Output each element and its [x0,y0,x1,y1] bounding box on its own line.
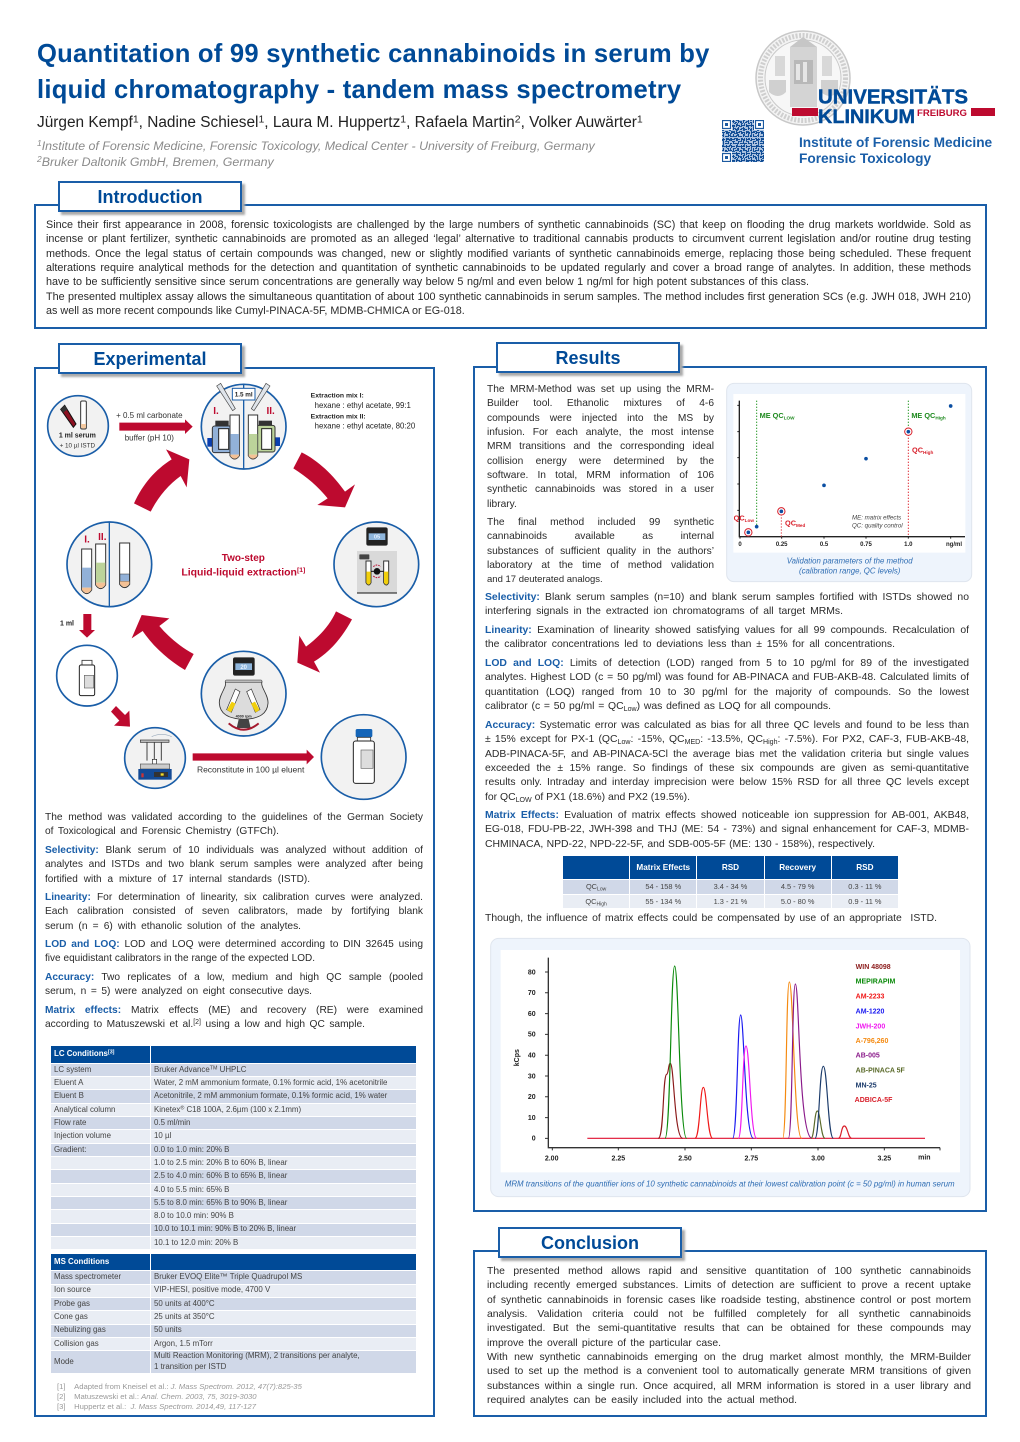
affiliations [37,138,596,169]
arrow: reconstitute: Reconstitute in 100 µl eluent [197,765,305,775]
text: conclusion: used to set up the method is a convenient tool to automatically generate MRM transitions of given [487,1366,971,1377]
table: LC and MS conditions: 8.0 to 10.0 min: 90% B [154,1211,234,1220]
university seal and logo [755,30,995,128]
circle: extraction mixes I and II: II. [266,406,275,417]
table: LC and MS conditions: Ion source [54,1285,91,1294]
icon: university seal [756,31,850,125]
text: accuracy results: exceeded the ± 15% range. So findings of these six compounds are given as semi-quantitative [485,763,969,774]
text: matrix effects: Matrix effects: Matrix effects (ME) and recovery (RE) were examined [45,1005,423,1016]
plot area and axes: 3.25 [878,1155,891,1162]
text: MRM method: The MRM-Method was set up using the MRM- [487,384,714,395]
plot area and axes: 40 [528,1053,536,1060]
arrow: to shaking [293,452,355,507]
text: accuracy results: results only. Intraday and interday imprecision were below 15% RSD for all three QC levels except [485,777,969,788]
table: LC and MS conditions: Mode [54,1357,74,1366]
chart labels: ME QC [911,411,935,420]
table: LC and MS conditions: 10.1 to 12.0 min: 20% B [154,1238,238,1247]
circle: serum sample: 1 ml serum [59,433,96,440]
table: LC and MS conditions: Analytical column [54,1105,115,1114]
process diagram: two-step liquid-liquid extraction [46,382,420,800]
plot area and axes: 2.75 [745,1155,758,1162]
text: matrix effects results: Matrix Effects: Evaluation of matrix effects showed noticeable ion suppression for AB-001, AKB48, [485,810,969,821]
panel: introduction [34,204,987,329]
table: matrix effects and recovery: Matrix Effects [636,863,690,872]
plot area and axes: kCps [514,1049,521,1066]
center label: Two-step [222,553,265,564]
text: conclusion: With new synthetic cannabinoids emerging on the drug market almost monthly, the MRM-Builder [487,1352,971,1363]
text: selectivity [45,845,423,885]
circle: separated phases: I. [84,535,90,546]
institute name: Institute of Forensic Medicine [799,135,992,150]
affiliations: 2Bruker Daltonik GmbH, Bremen, Germany [37,155,274,169]
table: LC and MS conditions: LC Conditions[3] [54,1049,114,1058]
table: LC and MS conditions: 1 transition per ISTD [154,1362,226,1371]
table: LC and MS conditions: Water, 2 mM ammonium formate, 0.1% formic acid, 1% acetonitrile [154,1078,387,1087]
text: linearity results [485,625,970,650]
text: introduction: Since their first appearance in 2008, forensic toxicologists are challenged by the large numbers of synthetic cannabinoids (SC) that keep on flooding the drug markets worldwide. Sold as [46,219,971,231]
chart note: ME: matrix effects [852,515,901,522]
text: influence of matrix effects: Though, the influence of matrix effects could be compensated by use of an appropriate ISTD. [485,913,937,924]
text: conclusion: required analytes can be easily included into the actual method. [487,1395,797,1406]
table: matrix effects and recovery: QCHigh [585,897,607,907]
table: LC and MS conditions: Bruker AdvanceTM UHPLC [154,1065,246,1074]
circle: extraction mixes I and II: I. [213,406,219,417]
table: matrix effects and recovery: 55 - 134 % [645,897,681,906]
table: matrix effects and recovery: 1.3 - 21 % [714,897,747,906]
text: accuracy [45,972,423,997]
text: accuracy: serum, n = 5) were analyzed on eight consecutive days. [45,986,312,997]
text: accuracy results: Accuracy: Systematic error was calculated as bias for all three QC levels and found to be less than [485,720,969,731]
plot area and axes: 50 [528,1032,536,1039]
arrow: back to extraction [134,449,189,512]
logo: wordmark [792,86,995,128]
references [57,1382,302,1411]
plot area [733,394,965,553]
text: MRM method: collision energy were determined by the [487,456,714,467]
text: introduction: The presented multiplex assay allows the simultaneous quantitation of about 100 synthetic cannabinoids in serum samples. The method includes first generation SCs (e.g. JWH 018, JWH 210) [46,291,971,303]
arrow: to evaporation [111,706,130,727]
text: MRM method: synthetic cannabinoids was stored in a user [487,484,714,495]
arrow: back to phase separation [132,615,194,670]
text: matrix effects results: CHMINACA, NPD-22, NPD-22-5F, and SDB-005-5F (ME: 130 - 158%), respectively. [485,839,875,850]
center label second line: Liquid-liquid extraction [181,567,288,578]
chromatogram peaks [587,966,925,1138]
text: LOD and LOQ results [485,658,970,713]
icon: QR code [722,120,764,162]
circle: extraction mixes I and II: 1.5 ml [235,391,253,398]
chart labels [734,411,962,548]
text: linearity results: Linearity: Examination of linearity showed satisfying values for all 99 compounds. Recalculation of [485,625,969,636]
chart caption: MRM transitions of the quantifier ions of 10 synthetic cannabinoids at their lowest calibration point (c = 50 pg/ml) in human serum [505,1180,955,1189]
heading: conclusion [498,1227,682,1258]
table: LC and MS conditions: 50 units [154,1325,182,1334]
chart labels: ME QC [760,411,784,420]
table: LC and MS conditions: 10.0 to 10.1 min: 90% B to 20% B, linear [154,1224,296,1233]
table: LC and MS conditions: 10 µl [154,1131,171,1140]
chart note: QC: quality control [852,523,903,530]
table: matrix effects and recovery: 54 - 158 % [645,882,681,891]
panel: results [473,366,987,1212]
chart labels: Med [796,523,805,528]
logo: wordmark: KLINIKUM [818,107,915,128]
text: method validation: of Toxicological and Forensic Chemistry (GTFCh). [45,826,279,837]
table: matrix effects and recovery: RSD [722,863,739,872]
circle: final vial [321,715,406,799]
table: LC and MS conditions [51,1046,416,1373]
table: matrix effects and recovery: RSD [856,863,874,872]
arrow: add carbonate buffer [116,411,193,443]
text: final method: and 17 deuterated analogs. [487,574,603,585]
affiliations: 1Institute of Forensic Medicine, Forensic Toxicology, Medical Center - University of Freiburg, Germany [37,138,595,153]
heading: introduction: Introduction [98,187,202,207]
chart caption: (calibration range, QC levels) [799,566,901,575]
institute name [799,135,992,166]
table: LC and MS conditions: 0.0 to 1.0 min: 20% B [154,1145,229,1154]
text: extraction mixes: hexane : ethyl acetate, 99:1 [315,401,411,410]
plot area and axes: 0 [532,1136,536,1143]
legend: MN-25 [856,1082,877,1089]
chart labels: 1.0 [904,542,913,548]
text: conclusion: including recently emerged substances. Limits of detection are sufficient to prove a recent uptake [487,1280,971,1291]
text: matrix effects results: EG-018, FDU-PB-22, JWH-398 and THJ (ME: 54 - 73%) and signal enhancement for CAF-3, MDMB- [485,824,969,835]
table: LC and MS conditions: 1.0 to 2.5 min: 20% B to 60% B, linear [154,1158,287,1167]
text: matrix effects: according to Matuszewski et al.[2] using a low and high QC sample. [45,1019,365,1030]
text: introduction [46,219,971,317]
table: LC and MS conditions: Eluent B [54,1091,84,1100]
heading: experimental [58,343,242,374]
circle: serum sample [48,396,108,456]
legend: MEPIRAPIM [856,979,896,986]
plot area and axes: 70 [528,990,536,997]
text: accuracy results [485,720,969,804]
heading: conclusion: Conclusion [541,1233,639,1253]
arrow: reconstitute [193,750,314,775]
legend [855,964,906,1104]
text: conclusion: improve the overall picture of the particular case. [487,1338,721,1349]
chart labels: High [923,450,934,455]
text: accuracy results: ADB-PINACA-5F, and AB-PINACA-5Cl the average bias met the validation criteria but single values [485,749,969,760]
text: accuracy: Accuracy: Two replicates of a low, medium and high QC sample (pooled [45,972,423,983]
circle: centrifuge [201,651,286,736]
text: LOD and LOQ: five equidistant calibrators in the range of the expected LOD. [45,953,315,964]
text: LOD and LOQ results: calibrator (c = 50 pg/ml = QCLow) was defined as LOQ for all compounds. [485,701,831,713]
text: accuracy results: ± 15% except for PX-1 (QCLow: -15%, QCMED: -13.5%, QCHigh: -7.5%). For PX2, CAF-3, FUB-AKB-48, [485,734,969,746]
table: LC and MS conditions: 50 units at 400°C [154,1299,215,1308]
table: LC and MS conditions: 4.0 to 5.5 min: 65% B [154,1184,229,1194]
chart: validation parameters [726,383,972,582]
legend: AM-1220 [856,1008,885,1015]
references: [2] Matuszewski et al.: Anal. Chem. 2003, 75, 3019-3030 [57,1392,257,1401]
legend: ADBICA-5F [855,1097,893,1104]
panel: conclusion [473,1250,987,1417]
table: matrix effects and recovery: 0.9 - 11 % [848,897,881,906]
table: LC and MS conditions: Cone gas [54,1312,88,1321]
table: LC and MS conditions: 0.5 ml/min [154,1118,190,1127]
text: selectivity results: interfering signals in the extracted ion chromatograms of all target MRMs. [485,606,843,617]
text: LOD and LOQ: LOD and LOQ: LOD and LOQ were determined according to DIN 32645 using [45,939,423,950]
text: accuracy results: for QCLOW of PX1 (18.6%) and PX2 (19.5%). [485,792,690,804]
authors: Jürgen Kempf1, Nadine Schiesel1, Laura M. Huppertz1, Rafaela Martin2, Volker Auwärter1 [37,114,643,131]
text: linearity [45,892,423,932]
chart labels: 0 [738,542,742,548]
arrow: to centrifuge [297,611,352,673]
heading: results [496,342,680,373]
text: conclusion: of synthetic cannabinoids in forensic cases like roadside testing, abstinence control or post mortem [487,1295,971,1306]
table: LC and MS conditions: 25 units at 350°C [154,1312,215,1321]
legend: WIN 48098 [856,964,891,971]
table: matrix effects and recovery [563,856,898,908]
table: matrix effects and recovery: 4.5 - 79 % [781,882,814,891]
chart labels: High [935,416,946,421]
title: Quantitation of 99 synthetic cannabinoids in serum by [37,40,710,68]
text: final method: cannabinoids available as internal [487,531,714,542]
legend: JWH-200 [856,1023,885,1030]
table: matrix effects and recovery: 3.4 - 34 % [714,882,747,891]
heading: results: Results [555,348,621,368]
text: extraction mixes: hexane : ethyl acetate, 80:20 [315,422,416,431]
table: LC and MS conditions: Mass spectrometer [54,1272,121,1281]
text: LOD and LOQ [45,939,423,964]
text: linearity: Each calibration consisted of seven calibrators, made by fortifying blank [45,906,423,917]
text: method validation [45,812,423,837]
text: introduction: have to be sufficiently sensitive since serum concentrations are generally way below 5 ng/ml and even below 1 ng/ml for high potent substances of this class. [46,276,809,288]
title [37,40,710,104]
text: MRM method: MRM transitions and the corresponding ideal [487,441,714,452]
heading: experimental: Experimental [93,349,207,369]
heading: introduction [58,181,242,212]
text: conclusion: substances within a single run. Once acquired, all MRM information is stored in a user library and [487,1381,971,1392]
center label second line: [1] [297,567,305,574]
text: introduction: incense or plant fertilizer, synthetic cannabinoids are promoted as an alleged ‘legal’ alternative to traditional cannabis products to circumvent current legislation and/or routine drug testing [46,233,971,245]
circle: separated phases [67,522,152,607]
arrow: transfer 1 ml [60,614,95,638]
table: LC and MS conditions: Injection volume [54,1131,111,1140]
plot area and axes: 80 [528,969,536,976]
text: conclusion: The presented method allows rapid and sensitive quantitation of 100 synthetic cannabinoids [487,1266,971,1277]
table: LC and MS conditions: Nebulizing gas [54,1325,106,1334]
text: introduction: alterations require analytical methods for the detection and quantitation of synthetic cannabinoids to be updated regularly and cover a broad range of analytes. In addition, these methods [46,262,971,274]
text: selectivity results [485,592,969,617]
circle: serum sample: + 10 µl ISTD [60,442,95,449]
chart note [852,515,903,530]
title: liquid chromatography - tandem mass spectrometry [37,76,681,104]
text: final method: laboratory at the time of method validation [487,560,714,571]
text: MRM method: Builder tool. Ethanolic mixtures of 4-6 [487,398,714,409]
circle: centrifuge: 4000 rpm [236,715,252,719]
references: [3] Huppertz et al.: J. Mass Spectrom. 2014,49, 117-127 [57,1402,256,1411]
plot area and axes: 3.00 [811,1155,825,1162]
circle: shaker [334,522,419,607]
chart caption: Validation parameters of the method [787,557,913,566]
text: MRM method: compounds were injected into the MS by [487,413,714,424]
plot area and axes: 30 [528,1073,536,1080]
text: selectivity: analytes and ISTDs and two blank serum samples were analyzed after being [45,859,423,870]
circle: transfer vial [57,645,117,706]
chart labels: LOW [784,416,795,421]
chart labels: QC [785,518,796,527]
text: MRM method: library. [487,499,517,510]
logo: wordmark: UNIVERSITÄTS [818,86,968,108]
table: LC and MS conditions: 5.5 to 8.0 min: 65% B to 90% B, linear [154,1198,287,1207]
plot area and axes: 2.50 [678,1155,692,1162]
panel: experimental [34,367,435,1417]
chart labels: 0.5 [820,542,829,548]
logo: wordmark: FREIBURG [917,108,967,119]
table: LC and MS conditions: Kinetex® C18 100A, 2.6µm (100 x 2.1mm) [154,1105,301,1114]
data points [745,404,952,536]
table: matrix effects and recovery: QCLow [586,882,606,893]
table: LC and MS conditions: Eluent A [54,1078,83,1087]
text: extraction mixes [311,393,416,431]
card background [727,383,972,582]
text: selectivity: fortified with a mixture of 17 internal standards (ISTD). [45,874,310,885]
card background [491,938,970,1197]
plot area and axes: 2.00 [545,1155,559,1162]
circle: centrifuge: 20 [240,665,248,671]
table: LC and MS conditions: MS Conditions [54,1257,109,1266]
chart caption [787,557,913,575]
circle: extraction mixes I and II [201,383,286,469]
chart labels: QC [734,513,745,522]
table: matrix effects and recovery: Recovery [779,863,816,872]
chart labels: Low [745,518,754,523]
table: LC and MS conditions: LC system [54,1065,91,1074]
text: MRM method: infusion. For each analyte, the most intense [487,427,714,438]
legend: A-796,260 [856,1038,888,1045]
table: matrix effects and recovery: 5.0 - 80 % [781,897,814,906]
chart labels: QC [912,445,923,454]
table: LC and MS conditions: VIP-HESI, positive mode, 4700 V [154,1285,270,1294]
text: selectivity results: Selectivity: Blank serum samples (n=10) and blank serum samples fortified with ISTDs showed no [485,592,969,603]
plot area and axes: 2.25 [612,1155,625,1162]
text: LOD and LOQ results: LOD and LOQ: Limits of detection (LOD) ranged from 5 to 10 pg/ml for 89 of the investigated [485,658,969,669]
text: introduction: as well as more recent compounds like Cumyl-PINACA-5F, MDMB-CHMICA or EG-018. [46,305,465,317]
arrow: add carbonate buffer: buffer (pH 10) [125,434,174,443]
text: final method: The final method included 99 synthetic [487,517,714,528]
text: final method: substances of sufficient quality in the authors’ [487,546,714,557]
legend: AB-005 [856,1053,880,1060]
table: LC and MS conditions: Argon, 1.5 mTorr [154,1339,213,1348]
text: extraction mixes: Extraction mix I: [311,393,364,400]
plot area and axes: min [918,1155,931,1162]
chart labels: 0.25 [776,542,788,548]
chart labels: ng/ml [946,542,962,548]
chart: MRM chromatogram [490,938,970,1197]
table: LC and MS conditions: Acetonitrile, 2 mM ammonium formate, 0.1% formic acid, 1% water [154,1091,387,1100]
table: LC and MS conditions: 2.5 to 4.0 min: 60% B to 65% B, linear [154,1171,287,1180]
circle: separated phases: II. [98,532,107,543]
legend: AB-PINACA 5F [856,1068,906,1075]
text: MRM method: software. In total, MRM information of 106 [487,470,714,481]
table: LC and MS conditions: Gradient: [54,1145,86,1154]
arrow: add carbonate buffer: + 0.5 ml carbonate [116,411,183,420]
plot area and axes: 10 [528,1115,536,1122]
table: LC and MS conditions: Flow rate [54,1118,86,1127]
circle: evaporator [125,728,185,788]
plot area and axes: 20 [528,1094,536,1101]
text: linearity: Linearity: For determination of linearity, six calibration curves were analyzed. [45,892,423,903]
circle: shaker: 05 [374,535,380,541]
text: linearity results: the calibrator concentrations led to deviations less than ± 15% for all concentrations. [485,639,895,650]
text: extraction mixes: Extraction mix II: [311,413,366,420]
text: LOD and LOQ results: analytes. Highest LOD (c = 50 pg/ml) was found for AB-PINACA and FUB-AKB-48. Calculated limits of [485,672,969,683]
text: introduction: methods. Once the legal status of certain compounds was changed, new or slightly modified variants of synthetic cannabinoids emerge, replacing those being scheduled. These frequent [46,248,971,260]
text: final method [487,517,714,585]
text: linearity: serum (n = 6) with ethanolic solution of the analytes. [45,921,301,932]
text: matrix effects [45,1005,423,1030]
table: matrix effects and recovery: 0.3 - 11 % [848,882,881,891]
arrow: transfer 1 ml: 1 ml [60,621,74,628]
chart labels: 0.75 [860,542,872,548]
text: selectivity: Selectivity: Blank serum of 10 individuals was analyzed without addition of [45,845,423,856]
table: LC and MS conditions: Probe gas [54,1299,90,1308]
table: LC and MS conditions: Bruker EVOQ Elite™ Triple Quadrupol MS [154,1272,302,1281]
text: matrix effects results [485,810,969,850]
references: [1] Adapted from Kneisel et al.: J. Mass Spectrom. 2012, 47(7):825-35 [57,1382,302,1391]
legend: AM-2233 [856,994,885,1001]
plot area and axes [501,950,960,1172]
text: conclusion: analysis. Validation criteria could not be fulfilled completely for all synthetic cannabinoids [487,1309,971,1320]
table: LC and MS conditions: Multi Reaction Monitoring (MRM), 2 transitions per analyte, [154,1351,360,1360]
text: conclusion: investigated. But the semi-quantitative results that can be obtained for these compounds may [487,1323,971,1334]
text: method validation: The method was validated according to the guidelines of the German Society [45,812,423,823]
institute name: Forensic Toxicology [799,151,931,166]
table: LC and MS conditions: Collision gas [54,1339,99,1348]
text: MRM method [487,384,714,510]
plot area and axes: 60 [528,1011,536,1018]
text: conclusion [487,1266,971,1406]
text: LOD and LOQ results: quantitation (LOQ) ranged from 10 to 30 pg/ml for the majority of compounds. So the lowest [485,687,969,698]
